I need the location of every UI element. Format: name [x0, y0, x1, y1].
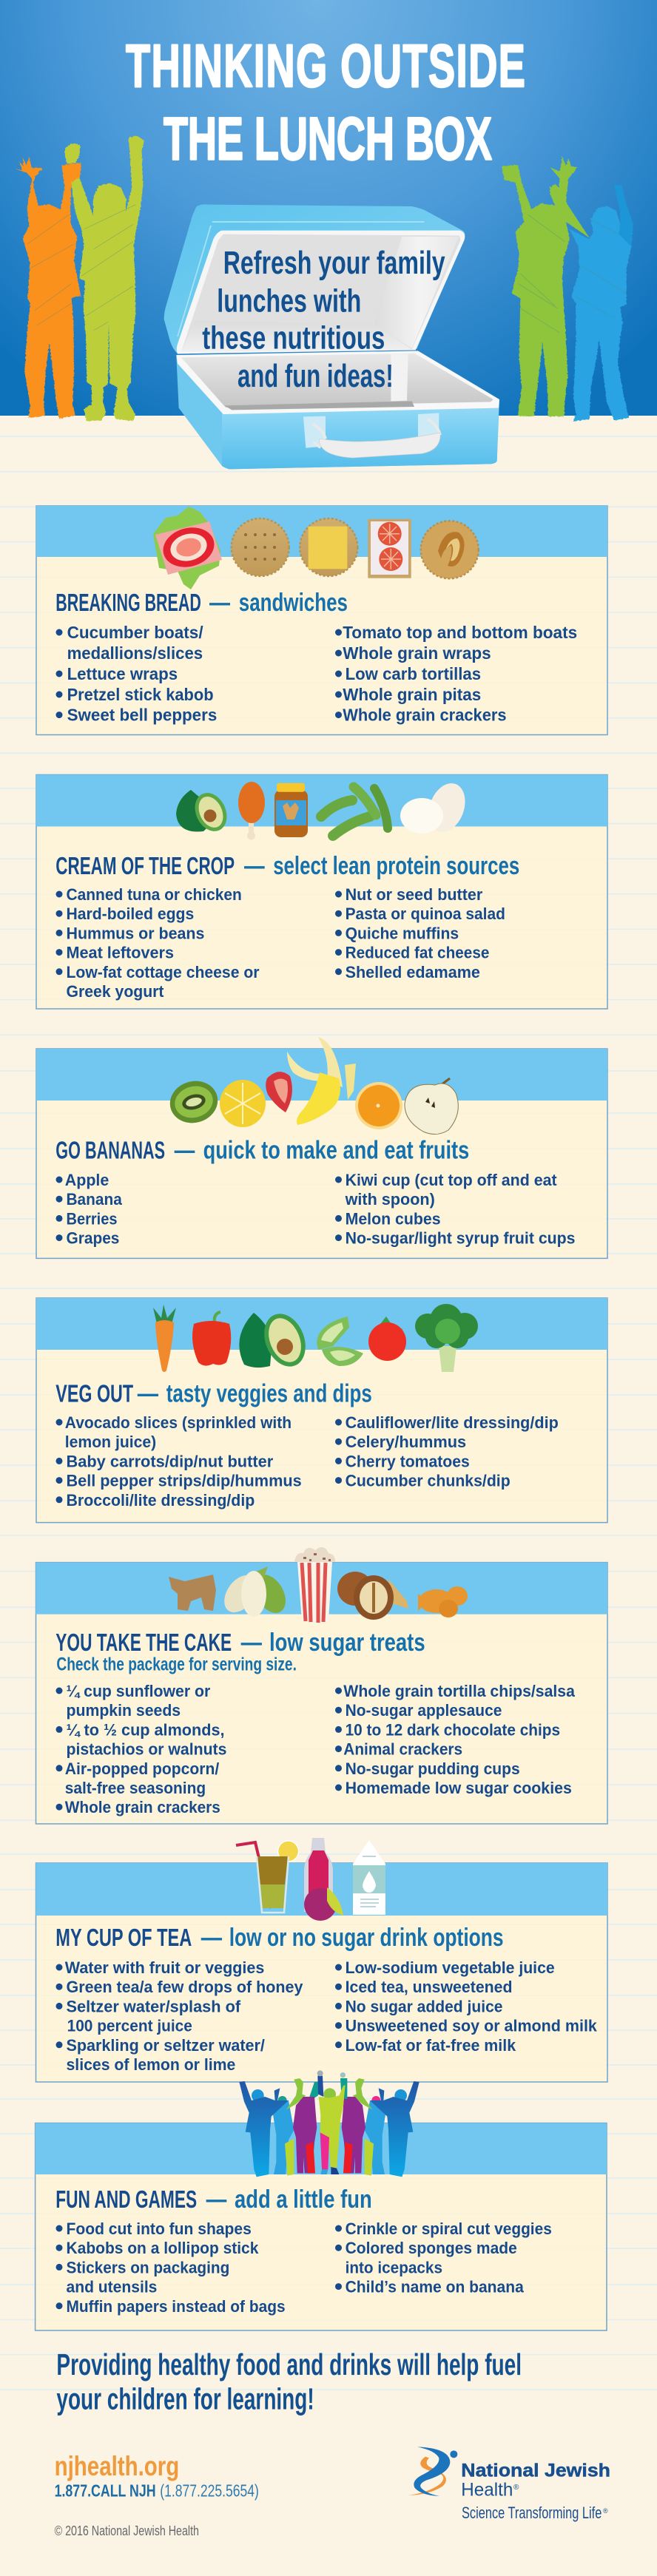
panel: my cup of tea — [36, 1838, 607, 2082]
list right column: Whole grain pitas — [343, 685, 481, 704]
heading: cream of the crop: — — [244, 852, 265, 880]
list right column: Crinkle or spiral cut veggies — [346, 2220, 552, 2238]
list left column: Banana — [67, 1190, 123, 1208]
list right column: Tomato top and bottom boats — [343, 623, 577, 642]
list right column — [335, 2220, 552, 2296]
heading: my cup of tea: low or no sugar drink options — [229, 1924, 504, 1952]
list left column: slices of lemon or lime — [67, 2055, 235, 2074]
title: THINKING OUTSIDE — [126, 32, 525, 100]
lunch box text: these nutritious — [202, 320, 385, 356]
phone number: 1.877.CALL NJH — [55, 2481, 156, 2500]
list right column: Low carb tortillas — [346, 664, 481, 683]
illustration: row of colorful children — [239, 2070, 420, 2177]
list left column: Stickers on packaging — [67, 2258, 229, 2276]
phone number: (1.877.225.5654) — [160, 2481, 259, 2500]
list left column: Food cut into fun shapes — [67, 2220, 252, 2238]
panel: breaking bread — [36, 506, 607, 735]
phone number — [55, 2481, 259, 2500]
lunch box text: and fun ideas! — [237, 358, 394, 394]
heading: my cup of tea — [55, 1924, 504, 1952]
list right column — [335, 1413, 559, 1490]
heading: fun and games: — — [206, 2185, 226, 2214]
heading: veg out — [55, 1380, 372, 1408]
panel: cream of the crop — [36, 775, 607, 1009]
list right column: Shelled edamame — [346, 963, 480, 981]
lid of lunch box — [164, 204, 465, 354]
heading: you take the cake: YOU TAKE THE CAKE — [55, 1629, 232, 1656]
heading: veg out: VEG OUT — [55, 1380, 133, 1407]
heading: fun and games — [55, 2185, 372, 2214]
list right column — [335, 623, 577, 725]
list left column: Avocado slices (sprinkled with — [65, 1413, 292, 1432]
panel background — [36, 775, 607, 1009]
list right column: No sugar added juice — [346, 1997, 503, 2015]
heading: cream of the crop: select lean protein sources — [273, 852, 519, 880]
heading: veg out: — — [138, 1380, 158, 1408]
list left column: ¼ cup sunflower or — [67, 1682, 211, 1700]
list left column: Sweet bell peppers — [67, 706, 217, 725]
lunch box text — [202, 245, 445, 394]
copyright: © 2016 National Jewish Health — [55, 2523, 199, 2538]
list left column: Low-fat cottage cheese or — [67, 963, 260, 981]
list left column: lemon juice) — [65, 1433, 156, 1451]
title — [126, 32, 525, 172]
list left column: Meat leftovers — [67, 944, 174, 962]
list left column — [56, 1171, 123, 1248]
list left column: salt-free seasoning — [65, 1779, 206, 1797]
illustration: open blue lunch box — [164, 204, 499, 469]
heading: breaking bread: — — [209, 589, 230, 617]
illustration: orange and lime children, left — [15, 135, 144, 421]
heading: breaking bread: BREAKING BREAD — [55, 589, 201, 616]
list left column: Baby carrots/dip/nut butter — [67, 1452, 274, 1470]
list right column — [335, 1682, 576, 1797]
list left column: Berries — [67, 1209, 117, 1228]
list left column — [56, 885, 260, 1001]
list left column: and utensils — [67, 2278, 157, 2296]
list right column: Celery/hummus — [346, 1433, 466, 1451]
panel: fun and games — [36, 2070, 607, 2330]
list right column: No-sugar applesauce — [346, 1701, 502, 1720]
heading: go bananas — [55, 1137, 469, 1165]
logo wordmark: National Jewish — [461, 2460, 610, 2481]
website url: njhealth.org — [55, 2451, 179, 2481]
heading: breaking bread: sandwiches — [239, 589, 348, 617]
handle of lunch box — [303, 413, 440, 458]
list right column — [335, 885, 505, 981]
icons: fruits — [165, 1037, 458, 1135]
list left column: Lettuce wraps — [67, 664, 178, 683]
list left column: Canned tuna or chicken — [67, 885, 242, 904]
list left column — [56, 1958, 303, 2074]
list right column: Child’s name on banana — [346, 2278, 525, 2296]
heading: my cup of tea: MY CUP OF TEA — [55, 1924, 192, 1951]
illustration: green and blue children, right — [502, 157, 633, 422]
list right column: Melon cubes — [346, 1209, 441, 1228]
panel background — [36, 1298, 607, 1523]
heading: you take the cake: — — [241, 1629, 262, 1657]
icons: low sugar treats — [169, 1547, 468, 1623]
heading: go bananas: GO BANANAS — [55, 1137, 165, 1164]
list right column: into icepacks — [346, 2258, 442, 2276]
icons: sandwich and crackers — [153, 507, 479, 589]
list right column: 10 to 12 dark chocolate chips — [346, 1720, 560, 1739]
list left column: medallions/slices — [67, 643, 203, 663]
heading: you take the cake — [55, 1629, 425, 1657]
list right column: Cauliflower/lite dressing/dip — [346, 1413, 559, 1432]
closing message: your children for learning! — [56, 2382, 314, 2416]
body of lunch box — [176, 351, 499, 469]
panel: you take the cake — [36, 1547, 607, 1824]
list left column: Greek yogurt — [67, 982, 164, 1001]
icon: helix — [408, 2447, 457, 2496]
panel background — [36, 2123, 607, 2330]
list left column: Grapes — [67, 1229, 119, 1248]
list right column: No-sugar pudding cups — [346, 1759, 520, 1778]
list left column: Sparkling or seltzer water/ — [67, 2036, 265, 2055]
panel: veg out — [36, 1298, 607, 1523]
list left column: 100 percent juice — [67, 2017, 192, 2035]
list right column: Nut or seed butter — [346, 885, 483, 904]
list right column — [335, 1171, 576, 1248]
closing message — [56, 2347, 522, 2416]
list right column: Whole grain crackers — [343, 706, 507, 725]
list left column: Kabobs on a lollipop stick — [67, 2239, 259, 2257]
panel background — [36, 1563, 607, 1824]
list left column: Water with fruit or veggies — [65, 1958, 264, 1977]
list left column: Bell pepper strips/dip/hummus — [67, 1472, 302, 1490]
heading: veg out: tasty veggies and dips — [166, 1380, 372, 1408]
logo wordmark: ® — [513, 2484, 519, 2492]
list right column — [335, 1958, 598, 2055]
list left column — [56, 1682, 226, 1816]
list right column: Colored sponges made — [346, 2239, 517, 2257]
list left column: Green tea/a few drops of honey — [67, 1978, 303, 1996]
heading: go bananas: quick to make and eat fruits — [203, 1137, 469, 1165]
list left column: pumpkin seeds — [67, 1701, 181, 1720]
list right column: Low-fat or fat-free milk — [346, 2036, 516, 2055]
list right column: Animal crackers — [343, 1740, 462, 1759]
logo wordmark: ® — [603, 2507, 608, 2515]
logo: National Jewish Health — [408, 2447, 610, 2522]
list right column: Kiwi cup (cut top off and eat — [346, 1171, 557, 1189]
lunch box text: lunches with — [217, 283, 361, 320]
heading: fun and games: FUN AND GAMES — [55, 2185, 197, 2213]
list left column: Whole grain crackers — [65, 1798, 220, 1816]
lunch box text: Refresh your family — [223, 245, 445, 281]
header: blue sky banner — [0, 0, 657, 416]
heading: go bananas: — — [175, 1137, 195, 1165]
list left column: Hard-boiled eggs — [67, 905, 194, 923]
heading: cream of the crop — [55, 852, 519, 880]
list right column: Unsweetened soy or almond milk — [346, 2017, 598, 2035]
subheading: serving size note: Check the package for serving size. — [56, 1654, 297, 1675]
list left column: Seltzer water/splash of — [67, 1997, 241, 2015]
icons: drinks — [236, 1838, 385, 1921]
list right column: No-sugar/light syrup fruit cups — [346, 1229, 576, 1248]
panel background — [36, 1049, 607, 1258]
list right column: Cucumber chunks/dip — [346, 1472, 511, 1490]
panel: go bananas — [36, 1037, 607, 1258]
list right column: Pasta or quinoa salad — [346, 905, 505, 923]
list right column: Cherry tomatoes — [346, 1452, 470, 1470]
list left column: Air-popped popcorn/ — [65, 1759, 219, 1778]
list left column: Pretzel stick kabob — [67, 685, 214, 704]
heading: fun and games: add a little fun — [235, 2185, 372, 2214]
title: THE LUNCH BOX — [164, 104, 492, 172]
list right column: Homemade low sugar cookies — [346, 1779, 572, 1797]
list right column: with spoon) — [345, 1190, 435, 1208]
logo wordmark: Health — [461, 2479, 513, 2500]
list left column — [56, 1413, 302, 1510]
list right column: Low-sodium vegetable juice — [346, 1958, 555, 1977]
list left column: Hummus or beans — [67, 924, 204, 942]
list left column: Apple — [65, 1171, 109, 1189]
list right column: Whole grain tortilla chips/salsa — [343, 1682, 576, 1700]
heading: my cup of tea: — — [201, 1924, 222, 1952]
logo wordmark: Science Transforming Life — [462, 2504, 602, 2522]
list left column: ¼ to ½ cup almonds, — [67, 1720, 225, 1739]
panel background — [36, 506, 607, 735]
heading: you take the cake: low sugar treats — [269, 1629, 425, 1657]
list left column: Muffin papers instead of bags — [67, 2297, 286, 2316]
icons: protein foods — [176, 778, 471, 840]
heading: cream of the crop: CREAM OF THE CROP — [55, 852, 235, 879]
list left column: Cucumber boats/ — [67, 623, 203, 642]
list left column — [56, 623, 217, 725]
list right column: Whole grain wraps — [343, 643, 491, 663]
icons: vegetables — [153, 1304, 478, 1373]
list left column: pistachios or walnuts — [67, 1740, 226, 1759]
list right column: Iced tea, unsweetened — [346, 1978, 512, 1996]
panel background — [36, 1863, 607, 2082]
list right column: Reduced fat cheese — [346, 944, 489, 962]
list left column: Broccoli/lite dressing/dip — [67, 1491, 255, 1510]
logo wordmark — [461, 2460, 610, 2522]
list left column — [56, 2220, 286, 2316]
list right column: Quiche muffins — [346, 924, 459, 942]
